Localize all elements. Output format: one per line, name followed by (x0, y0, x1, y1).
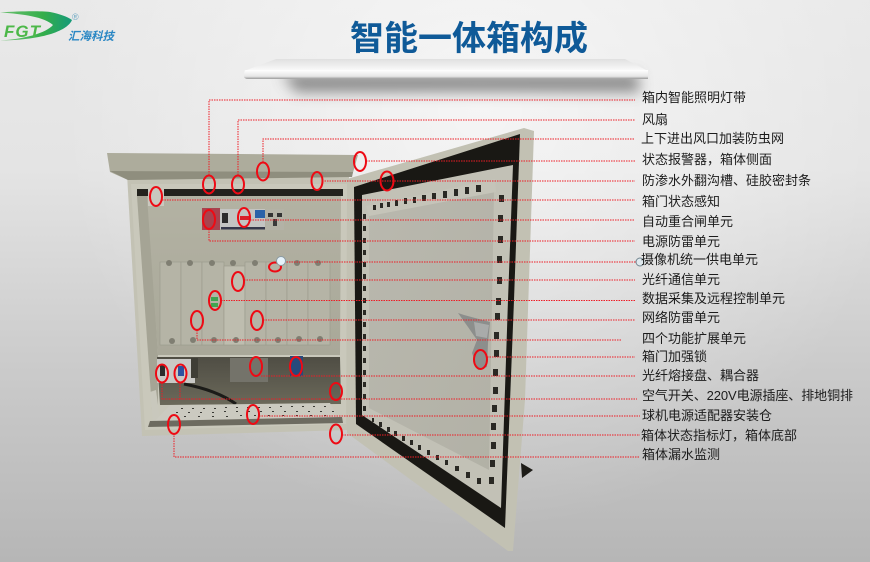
side bracket (150, 390, 160, 421)
tray holes (170, 406, 334, 417)
blue socket (290, 356, 303, 376)
leader: camera power (284, 261, 637, 263)
component labels: 箱体漏水监测 (642, 447, 720, 462)
leader: auto reclose (250, 219, 635, 221)
card thumb screws (166, 260, 323, 344)
door recessed centre (369, 192, 494, 470)
door outer frame (347, 128, 534, 551)
component labels: 四个功能扩展单元 (642, 331, 746, 346)
leader: power surge (209, 229, 635, 241)
cabinet inner frame (131, 184, 347, 430)
door inner panel (362, 165, 513, 508)
logo company name: 汇海科技 (68, 30, 115, 43)
air breakers (157, 358, 198, 383)
component labels: 风扇 (642, 112, 668, 127)
component labels: 空气开关、220V电源插座、排地铜排 (642, 388, 853, 403)
leader: air switch (162, 383, 637, 399)
cabinet outer shell (127, 174, 349, 436)
logo registered mark: ® (72, 12, 79, 22)
leader: lighting strip (209, 100, 635, 175)
open door (347, 128, 534, 551)
component labels: 光纤熔接盘、耦合器 (642, 368, 759, 383)
leader: fiber comms (244, 279, 635, 281)
green fiber ports (211, 297, 218, 307)
leader: adapter bay (259, 415, 640, 417)
perforated tray (155, 403, 338, 421)
component labels: 上下进出风口加装防虫网 (641, 131, 784, 146)
logo (0, 11, 115, 43)
leader: leak sensor (174, 433, 640, 457)
lower compartment (157, 357, 341, 405)
door sensor (148, 189, 164, 206)
leader: status light (342, 434, 640, 436)
hinge (348, 220, 352, 248)
main equipment panel (147, 196, 341, 355)
top dark strip (137, 189, 343, 196)
component labels: 防渗水外翻沟槽、硅胶密封条 (642, 173, 811, 188)
cabinet body (107, 153, 358, 436)
power adapter (230, 358, 268, 382)
callout leader lines (162, 100, 640, 457)
leader: door sensor (162, 199, 635, 201)
cabinet roof (107, 153, 358, 180)
leader: alarm (366, 160, 635, 162)
door gasket (354, 134, 520, 528)
component labels: 光纤通信单元 (642, 272, 720, 287)
door lock bar (458, 313, 490, 370)
component labels (641, 90, 853, 462)
component labels: 摄像机统一供电单元 (641, 252, 758, 267)
logo FGT lettering: FGT (4, 22, 42, 41)
camera connector dots (276, 256, 644, 266)
red callout rings (150, 152, 487, 444)
door latch tab (521, 463, 533, 478)
leader: door lock (487, 356, 635, 358)
power module row (202, 208, 284, 230)
component labels: 箱内智能照明灯带 (642, 90, 746, 105)
title: 智能一体箱构成 (350, 20, 588, 58)
component labels: 箱门状态感知 (642, 194, 720, 209)
component labels: 球机电源适配器安装仓 (642, 408, 772, 423)
door rail holes (363, 185, 504, 484)
leader: network surge (263, 319, 635, 321)
title shelf (244, 59, 648, 92)
component labels: 数据采集及远程控制单元 (642, 291, 785, 306)
component labels: 自动重合闸单元 (642, 214, 733, 229)
component labels: 箱体状态指标灯，箱体底部 (641, 428, 797, 443)
component labels: 网络防雷单元 (642, 310, 720, 325)
leader: gutter and seal (322, 180, 635, 182)
expansion cards (160, 262, 330, 345)
inner side wall (137, 196, 158, 410)
component labels: 状态报警器，箱体侧面 (642, 152, 772, 167)
leader: data acquisition (221, 300, 635, 302)
leader: four expansion units (197, 330, 622, 340)
component labels: 箱门加强锁 (642, 349, 707, 364)
logo swoosh (0, 11, 72, 40)
power cable (184, 384, 236, 404)
door top rail (366, 179, 496, 216)
leader: fan (238, 120, 635, 175)
leader: insect screen (263, 139, 635, 162)
component labels: 电源防雷单元 (642, 234, 720, 249)
dark gap under tray (148, 417, 343, 427)
leader: fiber splice (261, 375, 635, 377)
